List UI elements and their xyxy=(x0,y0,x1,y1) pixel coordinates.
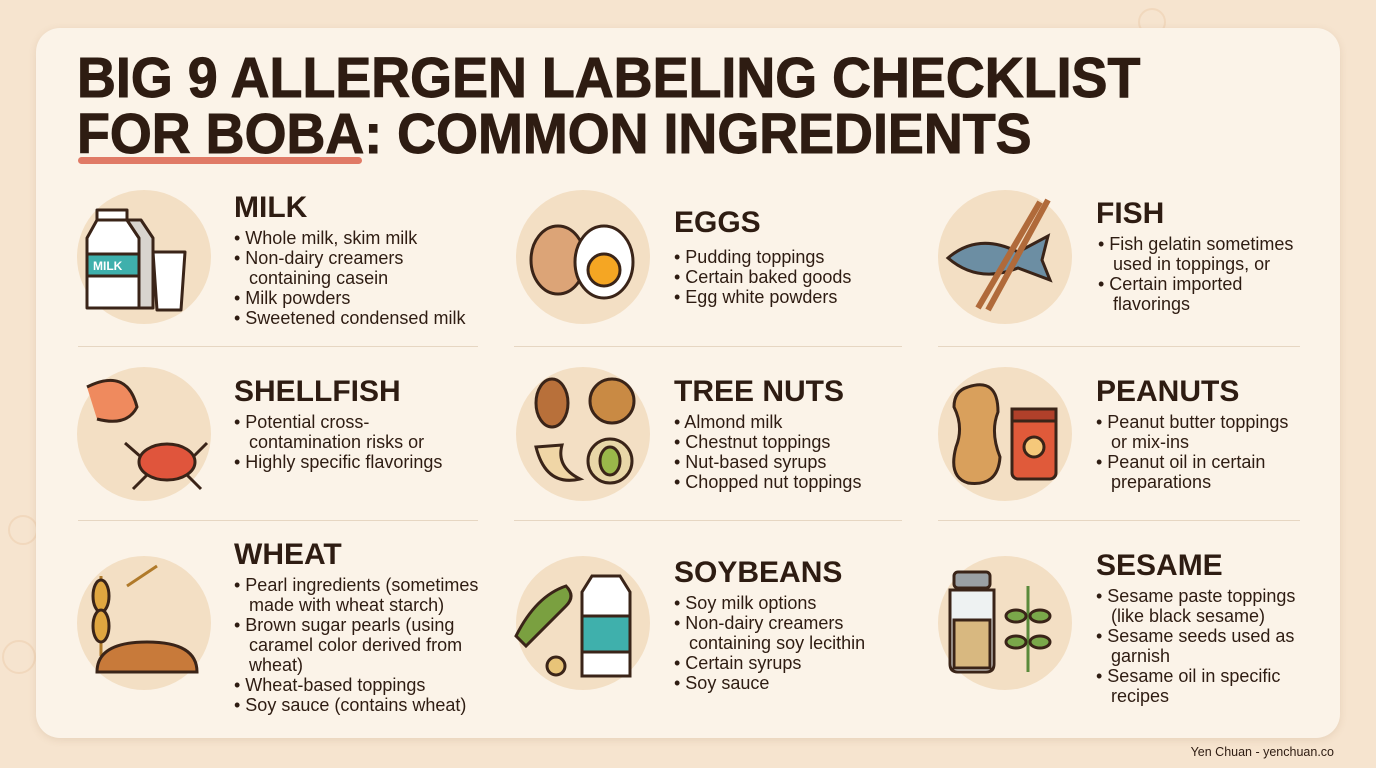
list: sesame: • Sesame paste toppings xyxy=(1096,586,1295,606)
list: eggs: • Pudding toppings xyxy=(674,247,824,267)
list: soybeans: • Non-dairy creamers xyxy=(674,613,843,633)
heading: milk: MILK xyxy=(234,191,307,224)
list: tree nuts: • Nut-based syrups xyxy=(674,452,826,472)
list: wheat: • Wheat-based toppings xyxy=(234,675,425,695)
list: fish: • Fish gelatin sometimes xyxy=(1098,234,1293,254)
list: fish xyxy=(1098,234,1293,314)
list: soybeans: • Certain syrups xyxy=(674,653,801,673)
list: sesame: recipes xyxy=(1111,686,1169,706)
list: peanuts: or mix-ins xyxy=(1111,432,1189,452)
heading: wheat: WHEAT xyxy=(234,538,342,571)
list: eggs: • Certain baked goods xyxy=(674,267,851,287)
list: milk xyxy=(234,228,466,328)
list: tree nuts: • Almond milk xyxy=(674,412,782,432)
list: wheat: caramel color derived from xyxy=(249,635,462,655)
icon: sesame xyxy=(938,556,1072,690)
list: sesame: (like black sesame) xyxy=(1111,606,1265,626)
list: eggs xyxy=(674,247,851,307)
list: milk: • Sweetened condensed milk xyxy=(234,308,465,328)
list: milk: containing casein xyxy=(249,268,388,288)
heading: tree nuts: TREE NUTS xyxy=(674,375,844,408)
list: milk: • Milk powders xyxy=(234,288,350,308)
list: milk: • Non-dairy creamers xyxy=(234,248,403,268)
list: sesame xyxy=(1096,586,1295,706)
icon: soybeans xyxy=(516,556,650,690)
list: milk: • Whole milk, skim milk xyxy=(234,228,417,248)
list: tree nuts xyxy=(674,412,861,492)
heading: peanuts: PEANUTS xyxy=(1096,375,1239,408)
heading: sesame: SESAME xyxy=(1096,549,1223,582)
list: peanuts xyxy=(1096,412,1288,492)
list: fish: used in toppings, or xyxy=(1113,254,1270,274)
icon: fish xyxy=(938,190,1072,324)
list: shellfish: • Highly specific flavorings xyxy=(234,452,442,472)
icon: milk xyxy=(77,190,211,324)
icon: shellfish xyxy=(77,367,211,501)
list: peanuts: preparations xyxy=(1111,472,1211,492)
list: shellfish: contamination risks or xyxy=(249,432,424,452)
list: wheat: made with wheat starch) xyxy=(249,595,444,615)
icon: tree nuts xyxy=(516,367,650,501)
list: soybeans xyxy=(674,593,865,693)
list: fish: • Certain imported xyxy=(1098,274,1242,294)
title: BIG 9 ALLERGEN LABELING CHECKLIST xyxy=(77,46,1140,110)
list: peanuts: • Peanut oil in certain xyxy=(1096,452,1265,472)
heading: soybeans: SOYBEANS xyxy=(674,556,842,589)
list: soybeans: containing soy lecithin xyxy=(689,633,865,653)
title xyxy=(77,46,1140,166)
heading: shellfish: SHELLFISH xyxy=(234,375,401,408)
list: fish: flavorings xyxy=(1113,294,1190,314)
heading: fish: FISH xyxy=(1096,197,1164,230)
list: wheat: • Pearl ingredients (sometimes xyxy=(234,575,478,595)
list: wheat: • Brown sugar pearls (using xyxy=(234,615,454,635)
icon: milk: MILK xyxy=(93,259,123,273)
footer credit: Yen Chuan - yenchuan.co xyxy=(1191,745,1334,759)
list: eggs: • Egg white powders xyxy=(674,287,837,307)
icon: wheat xyxy=(77,556,211,690)
icon: peanuts xyxy=(938,367,1072,501)
list: sesame: • Sesame oil in specific xyxy=(1096,666,1280,686)
list: tree nuts: • Chopped nut toppings xyxy=(674,472,861,492)
list: sesame: garnish xyxy=(1111,646,1170,666)
list: wheat: wheat) xyxy=(249,655,303,675)
icon: eggs xyxy=(516,190,650,324)
title underline xyxy=(78,157,362,164)
list: shellfish xyxy=(234,412,442,472)
list: wheat: • Soy sauce (contains wheat) xyxy=(234,695,466,715)
list: wheat xyxy=(234,575,478,715)
list: soybeans: • Soy sauce xyxy=(674,673,769,693)
list: shellfish: • Potential cross- xyxy=(234,412,369,432)
heading: eggs: EGGS xyxy=(674,206,761,239)
list: peanuts: • Peanut butter toppings xyxy=(1096,412,1288,432)
list: soybeans: • Soy milk options xyxy=(674,593,816,613)
title: FOR BOBA: COMMON INGREDIENTS xyxy=(77,102,1032,166)
list: tree nuts: • Chestnut toppings xyxy=(674,432,830,452)
list: sesame: • Sesame seeds used as xyxy=(1096,626,1294,646)
